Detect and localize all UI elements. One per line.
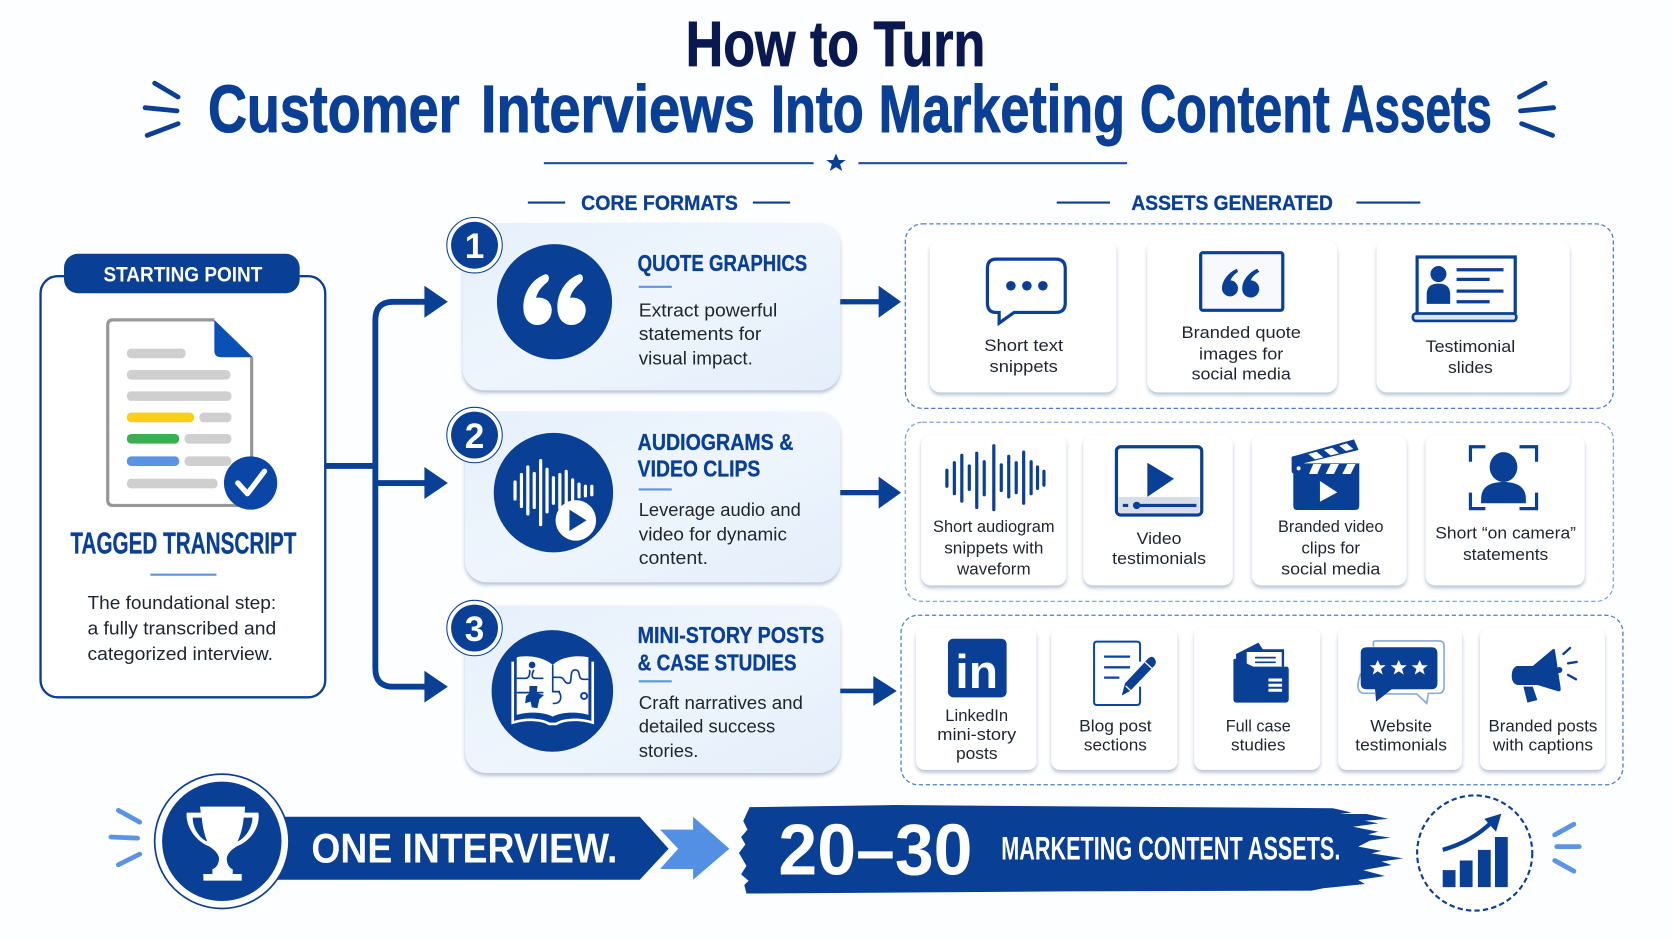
card: branded quote images bbox=[1147, 240, 1337, 392]
title: Content bbox=[1140, 72, 1330, 147]
card: linkedin mini-story posts: LinkedIn bbox=[945, 706, 1008, 725]
card: branded posts with captions: Branded posts bbox=[1489, 716, 1597, 735]
card: linkedin mini-story posts bbox=[916, 628, 1036, 770]
title: Customer bbox=[208, 72, 460, 147]
card: branded video clips bbox=[1252, 435, 1406, 585]
badge: 3: 3 bbox=[465, 610, 484, 649]
card: branded quote images: images for bbox=[1199, 344, 1284, 363]
icon: tagged document bbox=[108, 320, 277, 510]
text: quote graphics description: visual impact. bbox=[639, 348, 753, 369]
card: short audiogram snippets bbox=[921, 435, 1066, 585]
title divider with star bbox=[544, 154, 1127, 171]
heading: mini-story posts bbox=[638, 622, 824, 676]
badge: 1 bbox=[447, 218, 502, 273]
banner: one interview: ONE INTERVIEW. bbox=[311, 825, 617, 872]
heading: tagged transcript: TAGGED TRANSCRIPT bbox=[70, 525, 297, 560]
heading: quote graphics: QUOTE GRAPHICS bbox=[638, 250, 807, 276]
title: How to Turn bbox=[686, 8, 985, 80]
card: short audiogram snippets: snippets with bbox=[944, 538, 1043, 557]
text: mini-story description: Craft narratives and bbox=[639, 692, 803, 713]
card: video testimonials: testimonials bbox=[1112, 549, 1206, 568]
card: blog post sections bbox=[1051, 628, 1177, 770]
card: branded video clips: clips for bbox=[1301, 538, 1360, 557]
icon: growth chart bbox=[1417, 795, 1532, 911]
card: branded video clips: social media bbox=[1281, 560, 1381, 579]
heading: audiograms and video clips bbox=[638, 429, 793, 482]
icon: bottom sparks right bbox=[1555, 824, 1579, 871]
heading: mini-story posts: MINI-STORY POSTS bbox=[638, 622, 824, 648]
arrow: quote graphics to assets bbox=[840, 286, 901, 318]
card: short on camera statements: statements bbox=[1463, 545, 1548, 564]
text: audiograms description: Leverage audio and bbox=[639, 499, 801, 520]
card: testimonial slides: Testimonial bbox=[1426, 337, 1515, 356]
card: branded video clips: Branded video bbox=[1278, 517, 1384, 536]
arrow: audiograms to assets bbox=[840, 477, 901, 509]
card: linkedin mini-story posts: in bbox=[955, 646, 998, 698]
badge: starting point bbox=[64, 254, 300, 293]
card: branded quote images: Branded quote bbox=[1181, 323, 1301, 342]
panel: audiograms and video clips bbox=[447, 407, 840, 582]
card: branded posts with captions bbox=[1480, 628, 1605, 770]
title: Into bbox=[771, 72, 864, 147]
badge: 1: 1 bbox=[465, 227, 484, 266]
card: short audiogram snippets: Short audiogram bbox=[933, 517, 1055, 536]
heading: audiograms and video clips: AUDIOGRAMS & bbox=[638, 429, 793, 455]
banner: brush stroke result bbox=[739, 805, 1403, 894]
text: audiograms description: video for dynamic bbox=[639, 524, 787, 545]
badge: 3 bbox=[447, 600, 502, 656]
card: testimonial slides bbox=[1377, 240, 1570, 392]
banner: one interview bbox=[272, 817, 669, 880]
text: starting point description bbox=[87, 592, 276, 664]
card: full case studies bbox=[1194, 628, 1320, 770]
panel: assets row 2 bbox=[905, 422, 1613, 601]
icon: puzzle book bbox=[492, 630, 613, 752]
badge: starting point: STARTING POINT bbox=[103, 263, 262, 287]
card: short audiogram snippets: waveform bbox=[956, 560, 1031, 579]
card: website testimonials bbox=[1338, 628, 1462, 770]
icon: bottom sparks left bbox=[111, 810, 140, 865]
banner: brush stroke result: 20–30 bbox=[778, 809, 972, 890]
card: testimonial slides: slides bbox=[1448, 358, 1493, 377]
icon: title sparks left bbox=[145, 83, 178, 135]
card: branded posts with captions: with captions bbox=[1492, 736, 1593, 755]
text: quote graphics description: statements for bbox=[639, 323, 761, 344]
connector arrows from starting point bbox=[325, 286, 448, 703]
text: starting point description: The foundational step: bbox=[87, 592, 276, 613]
card: video testimonials bbox=[1083, 435, 1233, 585]
badge: 2 bbox=[447, 407, 502, 463]
arrow: light blue bbox=[660, 817, 729, 880]
heading: core formats: CORE FORMATS bbox=[581, 191, 738, 215]
card: short text snippets: Short text bbox=[984, 336, 1063, 355]
card: blog post sections: sections bbox=[1084, 736, 1147, 755]
text: audiograms description bbox=[639, 499, 801, 568]
card: branded quote images: social media bbox=[1192, 365, 1291, 384]
panel: assets row 3 bbox=[901, 615, 1623, 785]
text: mini-story description: stories. bbox=[639, 740, 698, 761]
heading: mini-story posts: & CASE STUDIES bbox=[638, 650, 797, 676]
panel: mini-story posts and case studies bbox=[447, 600, 840, 773]
card: full case studies: Full case bbox=[1226, 716, 1291, 735]
card: short on camera statements bbox=[1426, 435, 1585, 585]
card: full case studies: studies bbox=[1231, 736, 1285, 755]
card: website testimonials: testimonials bbox=[1355, 736, 1447, 755]
title bbox=[208, 8, 1492, 147]
panel: starting point bbox=[41, 254, 325, 697]
text: starting point description: a fully transcribed and bbox=[87, 617, 276, 638]
text: mini-story description bbox=[639, 692, 803, 761]
panel: assets row 1 bbox=[905, 224, 1613, 408]
heading: assets generated: ASSETS GENERATED bbox=[1131, 191, 1333, 215]
panel: quote graphics bbox=[447, 218, 840, 390]
text: audiograms description: content. bbox=[639, 547, 708, 568]
card: blog post sections: Blog post bbox=[1079, 716, 1152, 735]
text: quote graphics description: Extract powerful bbox=[639, 300, 777, 321]
icon: waveform with play bbox=[494, 433, 613, 552]
title: Assets bbox=[1341, 72, 1492, 147]
icon: title sparks right bbox=[1519, 83, 1554, 135]
card: linkedin mini-story posts: mini-story bbox=[937, 725, 1017, 744]
title: Marketing bbox=[879, 72, 1125, 147]
heading: audiograms and video clips: VIDEO CLIPS bbox=[638, 456, 760, 482]
card: short on camera statements: Short “on camera” bbox=[1435, 523, 1576, 542]
card: short text snippets bbox=[930, 240, 1116, 392]
arrow: mini-story to assets bbox=[840, 676, 897, 706]
card: linkedin mini-story posts: posts bbox=[956, 744, 998, 763]
badge: 2: 2 bbox=[465, 417, 484, 456]
card: short text snippets: snippets bbox=[990, 357, 1058, 376]
icon: quote marks bbox=[497, 244, 612, 359]
card: video testimonials: Video bbox=[1137, 529, 1181, 548]
icon: trophy badge bbox=[155, 774, 289, 908]
title: Interviews bbox=[481, 72, 755, 147]
text: mini-story description: detailed success bbox=[639, 716, 775, 737]
text: starting point description: categorized interview. bbox=[87, 643, 273, 664]
text: quote graphics description bbox=[639, 300, 777, 369]
banner: brush stroke result: MARKETING CONTENT ASSETS. bbox=[1001, 830, 1340, 866]
card: website testimonials: Website bbox=[1370, 716, 1432, 735]
